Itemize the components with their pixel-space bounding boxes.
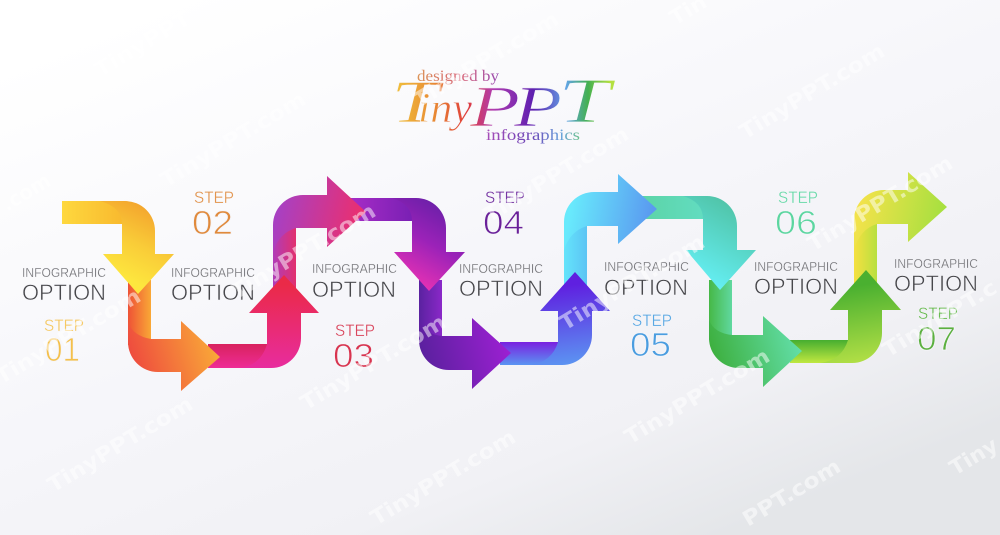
arrow 12: yellow to lime, up then right <box>854 172 947 300</box>
watermarks: TinyPPT.com <box>409 7 563 112</box>
arrow 1: yellow to orange, right then down <box>62 201 174 294</box>
option 3 text <box>312 261 397 302</box>
arrow 5: purple to magenta, right then down <box>350 198 465 291</box>
watermarks: PPT.com <box>738 454 845 531</box>
option 7 small line: INFOGRAPHIC <box>894 256 978 271</box>
step 05 label <box>630 311 672 363</box>
step 05 heading: STEP <box>632 311 672 330</box>
step 03 label <box>333 321 375 374</box>
logo tagline: designed by <box>417 68 499 85</box>
arrow 3: pink to crimson, right then up <box>208 275 319 368</box>
logo wordmark first P: P <box>469 74 520 139</box>
option 1 text <box>22 265 106 305</box>
option 7 large line: OPTION <box>894 271 978 296</box>
arrow 11: green, right then up <box>790 270 901 363</box>
option 5 small line: INFOGRAPHIC <box>604 259 689 274</box>
logo subtitle: infographics <box>486 127 580 144</box>
arrow 2: red to orange, down then right <box>128 280 220 391</box>
step 04 number: 04 <box>483 204 524 241</box>
step 04 heading: STEP <box>485 188 525 207</box>
watermarks: TinyPPT.com <box>735 39 889 144</box>
logo: designed by TinyPPT infographics <box>391 65 616 144</box>
watermarks: TinyPPT.com <box>555 230 709 335</box>
step 04 label <box>483 188 525 241</box>
step 07 label <box>917 304 958 357</box>
watermarks: TinyPPT.com <box>43 392 197 497</box>
logo wordmark second P: P <box>513 74 562 139</box>
step 06 label <box>775 188 818 241</box>
step 01 number: 01 <box>45 331 80 368</box>
watermarks: TinyPPT.com <box>366 425 520 530</box>
step 01 label <box>44 316 84 368</box>
option 5 large line: OPTION <box>604 275 688 300</box>
arrow 8: cyan, up then right <box>564 174 657 290</box>
watermarks: TinyPPT <box>90 6 196 82</box>
arrow 9: teal, right then down <box>640 196 756 290</box>
option 3 small line: INFOGRAPHIC <box>312 261 397 276</box>
step 05 number: 05 <box>630 326 671 363</box>
watermarks: Tiny <box>945 433 1000 480</box>
arrow 6: deep purple, down then right <box>419 280 511 389</box>
step 02 heading: STEP <box>194 188 234 207</box>
option 4 small line: INFOGRAPHIC <box>459 261 543 276</box>
option 6 large line: OPTION <box>754 274 838 299</box>
step 02 number: 02 <box>192 204 233 241</box>
watermarks: TinyPPT.c <box>878 275 1000 362</box>
option 6 text <box>754 259 838 299</box>
step 03 heading: STEP <box>335 321 375 340</box>
watermarks: TinyPPT.com <box>156 87 310 192</box>
option 4 large line: OPTION <box>459 276 543 301</box>
watermarks: TinyPPT.com <box>620 344 774 449</box>
option 4 text <box>459 261 543 301</box>
step 03 number: 03 <box>333 337 374 374</box>
option 2 text <box>171 265 255 305</box>
watermarks: TinyPPT.com <box>803 151 957 256</box>
option 7 text <box>894 256 978 296</box>
step 07 number: 07 <box>917 320 956 357</box>
watermarks: TinyPPT.com <box>296 310 450 415</box>
logo wordmark iny: iny <box>418 86 472 132</box>
step 02 label <box>192 188 234 241</box>
option 6 small line: INFOGRAPHIC <box>754 259 838 274</box>
step 06 heading: STEP <box>778 188 818 207</box>
option 5 text <box>604 259 689 300</box>
option 3 large line: OPTION <box>312 277 396 302</box>
arrow 7: violet to blue, right then up <box>500 272 610 365</box>
option 1 large line: OPTION <box>22 280 106 305</box>
watermarks: TinyPPT.com <box>479 122 633 227</box>
arrow 10: green, down then right <box>709 280 802 387</box>
option 1 small line: INFOGRAPHIC <box>22 265 106 280</box>
step 06 number: 06 <box>775 204 817 241</box>
step 01 heading: STEP <box>44 316 84 335</box>
watermarks: TinyPPT.com <box>226 199 380 304</box>
arrow 4: violet to pink, up then right <box>273 176 366 300</box>
logo wordmark T: T <box>391 69 444 135</box>
step 07 heading: STEP <box>918 304 958 323</box>
option 2 large line: OPTION <box>171 280 255 305</box>
option 2 small line: INFOGRAPHIC <box>171 265 255 280</box>
logo wordmark final T: T <box>558 65 616 136</box>
